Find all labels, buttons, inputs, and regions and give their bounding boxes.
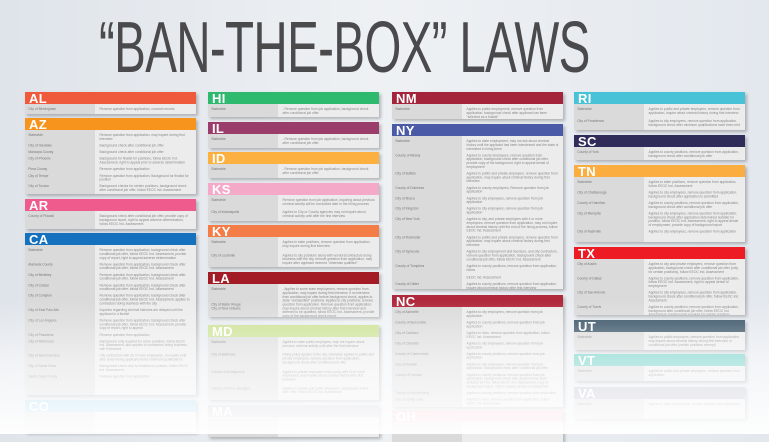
panel: KY (208, 225, 379, 267)
panel: MD: Hiring policy applies to the city, ordinance applies to public and private employers, remove question from application, background check after conditional job offer (283, 354, 374, 364)
panel: CA: City of Los Angeles (28, 319, 57, 322)
panel: VT: Applies to public and private employers, remove question from application (649, 370, 740, 377)
panel: OH (392, 410, 563, 442)
panel: AZ: City of Tucson (28, 185, 49, 188)
panel: TX: City of Austin (577, 263, 597, 266)
panel: CA: Remove question from application, background check after conditional job offer, follow EEOC Ind. Assessment (100, 273, 186, 280)
panel: CA: City of Pasadena (28, 333, 53, 337)
panel: AZ: Remove question from application, Background for finalist for position (100, 174, 189, 181)
panel: NY: Applies to county positions, remove question from application, follow (467, 264, 557, 272)
panel: TX (574, 247, 745, 315)
panel: HI (208, 92, 379, 117)
panel: UT: Statewide (577, 336, 592, 339)
panel: NY: Applies to city employment and licensure, and city contractors, remove question from application, background check after conditional job offer, follow EEOC Ind. Assessment (467, 250, 558, 261)
panel: NY: Applies to city, and private employers with 4 or more employees, remove question from application, may not inquire about criminal history until the end of the hiring process, follow EEOC Ind. Assessment (467, 218, 558, 233)
panel: NY: County of Ulster (395, 283, 419, 286)
panel: NC: County of Durham (395, 373, 422, 377)
panel: NC: Applies to county positions, remove question from job application (467, 352, 545, 360)
panel: NC: Applies to city employees, remove question from job application, background check after conditional job offer (467, 363, 548, 370)
panel: TN: Applies to state positions, remove question from application, follow EEOC Ind. Assessment (649, 181, 736, 188)
panel: TX: County of Dallas (577, 277, 602, 280)
panel: TN: City of Nashville (577, 230, 601, 233)
panel: UT: Applies to public employers, remove question from application, may inquire about criminal history during first interview or conditional job offer (certain positions exempt) (649, 336, 740, 347)
panel: KY: Applies to city positions along with vendors/contractors doing business with the city, remove question from application, may inquire after applicant deemed "otherwise qualified" (283, 254, 372, 265)
panel: NY: City of Syracuse (395, 250, 419, 253)
panel: VA: Statewide (577, 403, 592, 406)
panel: CA: City of Richmond (28, 340, 53, 343)
panel: CO (25, 400, 196, 432)
panel: KY: Applies to state positions, remove question from application, may inquire during first interview (283, 241, 370, 248)
panel: MD: Applies to private and public employers, background check after offer, follow EEOC Ind. Assessment (283, 387, 369, 394)
panel: AZ: City of Glendale (28, 144, 52, 147)
panel: NY (392, 124, 563, 289)
panel: TX: Applies to city and private employers, remove question from application, background check after conditional job offer (only for certain positions), follow EEOC Ind. Assessment (649, 263, 738, 274)
panel: NC: Applies to county positions, remove question from job application (467, 321, 545, 328)
panel: TN (574, 165, 745, 242)
panel: NY: Applies to county employees, remove question from application, background check after conditional job offer, provide copy of the background, right to appeal denial of employment (467, 154, 549, 169)
panel: MD: Applies to private employers and county with 15 or more employees, may inquire about criminal history after first interview (283, 370, 365, 381)
panel: MD: County of Montgomery (211, 370, 245, 374)
panel: NY: County of Tompkins (395, 264, 424, 268)
panel: HI: - Remove question from job application, background check after conditional job offer. (283, 108, 368, 115)
panel: CA: City of Berkeley (28, 273, 51, 277)
panel: AL: City of Birmingham (28, 108, 56, 111)
panel: NY: County of Dutchess (395, 186, 424, 190)
panel: AZ: Maricopa County (28, 151, 53, 154)
panel: NY: Applies to public and private employers, remove question from application, may inquire about criminal history during first interview (467, 172, 558, 183)
panel: NY: Statewide (395, 140, 410, 143)
panel: TN: Applies to city employees, remove question from application (649, 230, 736, 233)
panel: CA: Remove question from application (100, 375, 149, 378)
panel: CA: Remove question from application, background check after conditional job offer, follow EEOC Ind. Assessment, applies to contractors doing business with the city (100, 294, 190, 305)
panel: NM: Statewide (395, 108, 410, 111)
panel: CA: Remove question from application (100, 333, 149, 337)
panel: NM: Applies to public employment, remove question from application, background check after applicant has been "selected as a finalist" (467, 108, 547, 119)
panel: TX: Applies to county positions, remove question from application, follow EEOC Ind. Assessment, right to appeal denial of employment (649, 277, 739, 288)
panel: CA: City of East Palo Alto (28, 309, 59, 312)
panel: TN: Applies to county positions, remove question from application, background check after conditional job offer (649, 201, 739, 209)
panel: TN: Applies to city employees, remove question from application, background check after application is submitted (649, 191, 737, 198)
panel: RI: Statewide (577, 108, 592, 111)
panel: RI: City of Providence (577, 120, 604, 123)
panel: CA: Remove question from application, background check after conditional job offer, follow EEOC Ind. Assessment (100, 263, 186, 270)
panel: TN: County of Hamilton (577, 201, 605, 205)
panel: AZ: Remove question from application, may inquire during first interview (100, 134, 185, 141)
panel: IL: Statewide (211, 138, 226, 141)
panel: RI (574, 92, 745, 130)
panel: AZ: Background checks for certain positions, background check after conditional job offer, follow EEOC Ind. Assessment (100, 185, 186, 192)
panel: KS (208, 183, 379, 221)
panel: NC: City of Carrboro (395, 331, 419, 335)
panel: AZ: Remove question from application (100, 168, 149, 171)
panel: AZ: Background check after conditional job offer (100, 144, 164, 147)
panel: NC: City of Durham (395, 363, 417, 366)
panel: TX: City of San Antonio (577, 291, 605, 294)
panel: LA: - Applies to some state employment, remove question from application, may inquire during first interview. If no interview than conditional job offer before background check, applies to state "unclassified" positions. Applies to city positions, remove question from application. Remove question from application, may inquire about criminal history after first interview and deemed to be qualified, follow EEOC Ind. Assessment, provide copy of the background check report. (283, 288, 374, 317)
panel: ID: Statewide (211, 168, 226, 171)
panel: NC: County of Buncombe (395, 321, 426, 324)
panel: MD (208, 325, 379, 400)
panel: TN: City of Memphis (577, 212, 601, 215)
panel: SC: Applies to county positions, remove question from application, background check after conditional job offer (649, 151, 739, 158)
panel: MD: Statewide (211, 341, 226, 344)
panel: HI: Statewide (211, 108, 226, 111)
panel: NC: Applies to town, remove question from application, follow EEOC Ind. Assessment (467, 331, 550, 339)
panel: NY: EEOC Ind. Assessment (467, 276, 501, 279)
panel: KS: Statewide (211, 199, 226, 202)
panel: LA (208, 272, 379, 317)
panel: LA: City of Baton Rouge (211, 303, 241, 306)
panel: LA: City of New Orleans (211, 307, 241, 310)
panel: TN: Applies to city employees, remove question from application, background check after application determined suitable for position, follow EEOC Ind. Assessment, right to appeal denial of employment, provide copy of background report (649, 212, 738, 227)
panel: AL: Remove question from application, conceal records (100, 108, 175, 111)
panel: NY: Applies to city employees, remove question from job application (467, 197, 543, 204)
panel: AR (25, 199, 196, 229)
panel: CA (25, 233, 196, 395)
panel: CA: City of Santa Clara (28, 365, 56, 368)
panel: NC: County of Mecklenburg (395, 391, 429, 395)
panel: IL: - Remove question from job application, background check after conditional job offer. (283, 138, 368, 145)
panel: ID (208, 152, 379, 178)
panel: NY: Applies to state employment, may not ask about criminal history until the applicant has been interviewed and the state is interested in hiring them (467, 140, 558, 151)
panel: SC (574, 135, 745, 160)
panel: CA: Remove question from application, background check after conditional job offer, follow EEOC Ind. Assessment, provide copy of report, right to appeal adverse determination (100, 249, 186, 260)
panel: LA: Statewide (211, 288, 226, 291)
panel: AR: County of Pulaski (28, 215, 54, 218)
panel: MD: County of Prince George's (211, 387, 250, 390)
panel: KY: Statewide (211, 241, 226, 244)
panel: KS: City of Indianapolis (211, 211, 239, 214)
panel: AZ: Background for finalist for positions, follow EEOC Ind. Assessment, right to appeal prior to adverse determination (100, 157, 185, 164)
panel: NC: Applies to town, remove question from application, follow EEOC Ind. Assessment (467, 398, 550, 405)
panel: NY: County of Albany (395, 154, 420, 157)
panel: CA: City contractors with 20 or more employees, no inquiry until after determining applicant meets minimum qualifications (100, 354, 186, 361)
panel: VT (574, 354, 745, 381)
panel: KY: City of Louisville (211, 254, 235, 257)
panel: IL (208, 122, 379, 148)
panel: TN: City of Chattanooga (577, 191, 606, 194)
panel: NC: County of Cumberland (395, 352, 428, 356)
panel: CA: Background check only for finalists for position, follow EEOC Ind. Assessment (100, 365, 188, 372)
panel: AZ: Pima County (28, 168, 47, 171)
panel: NC: Applies to city employees, remove question from job application (467, 342, 543, 349)
panel: NC (392, 295, 563, 407)
panel: SC: County of York (577, 151, 599, 154)
panel: MD: City of Baltimore (211, 354, 236, 357)
panel: AZ: City of Tempe (28, 174, 48, 178)
panel: AZ: City of Phoenix (28, 157, 50, 161)
panel: CA: Remove question from application, background check after conditional job offer, follow EEOC Ind. Assessment, provide copy of report, right to appeal (100, 319, 186, 330)
panel: TX: County of Travis (577, 305, 601, 309)
panel: AL (25, 92, 196, 114)
panel: TN: Statewide (577, 181, 592, 184)
panel: NY: City of Rochester (395, 236, 421, 239)
panel: CA: Santa Clara County (28, 375, 57, 378)
panel: NY: City of Buffalo (395, 172, 416, 175)
title: “BAN-THE-BOX” LAWS (99, 8, 590, 88)
panel: NY: City of Kingston (395, 207, 418, 211)
panel: CA: Remove question from application, background check after conditional job offer, follow EEOC Ind. Assessment (100, 284, 186, 291)
panel: CA: City of Compton (28, 294, 52, 298)
panel: NC: City of Charlotte (395, 342, 419, 345)
panel: RI: Applies to city employees, remove question from application, background check after minimum qualifications have been met (649, 120, 740, 127)
panel: CA: Background only required for some positions, follow EEOC Ind. Assessment, also applies to contractors doing business with Richmond (100, 340, 187, 351)
panel: KS: Remove question from job application, inquiring about previous criminal activity will be conducted later in the hiring process (283, 199, 375, 206)
panel: CA: City of San Francisco (28, 354, 60, 357)
panel: VA (574, 387, 745, 419)
panel: VT: Statewide (577, 370, 592, 373)
panel: NY: Applies to city employees, remove question from job application (467, 207, 543, 214)
panel: NC: Applies to city employees, remove question from job application (467, 311, 543, 318)
panel: CA: City of Carson (28, 284, 49, 287)
panel: NC: Applies to county positions, remove question from job application, background check after applicant has been selected for hire, follow EEOC Ind. Assessment, copy of background report, right to appeal denial of employment (467, 373, 548, 388)
panel: AR: Background check after conditional job offer, provide copy of background report, right to appeal adverse determination, follow EEOC Ind. Assessment (100, 215, 188, 226)
panel: NC: City of Spring Lake (395, 398, 423, 401)
panel: NC: City of Asheville (395, 311, 419, 314)
panel: NY: City of New York (395, 218, 420, 221)
panel: NY: City of Ithaca (395, 197, 415, 200)
panel: RI: Applies to public and private employers, remove question from application, inquire about criminal history during first interview (649, 108, 740, 115)
panel: VA: Applies to state employment, remove question from application (649, 403, 740, 406)
panel: AZ (25, 118, 196, 194)
panel: NC: Applies to county positions, remove question from application (467, 391, 556, 395)
panel: ID: - Remove question from job application, background check after conditional job offer. (283, 168, 368, 175)
panel: MD: Applies to state public employers, may not inquire about previous criminal activity until after the first interview (283, 341, 364, 348)
panel: KS: Applies to City or County agencies may not inquire about criminal activity until after the first interview (283, 211, 366, 218)
panel: UT (574, 320, 745, 350)
panel: NY: Applies to county employees, Remove question from job application (467, 186, 549, 193)
panel: CA: Inquiries regarding criminal histories are delayed until the applicant is a finalist (100, 309, 183, 316)
panel: NY: Applies to public and private employers, remove question from application, may inquire about criminal history during first interview (467, 236, 558, 247)
panel: CA: Alameda County (28, 263, 53, 266)
panel: TX: Applies to city employees, remove question from application, background check after conditional job offer, follow EEOC Ind. Assessment (649, 291, 739, 302)
panel: AZ: Background check after conditional job offer (100, 151, 164, 154)
panel: AZ: Statewide (28, 134, 43, 137)
panel: MA (208, 405, 379, 437)
panel: NM (392, 92, 563, 119)
panel: CA: Statewide (28, 249, 43, 252)
